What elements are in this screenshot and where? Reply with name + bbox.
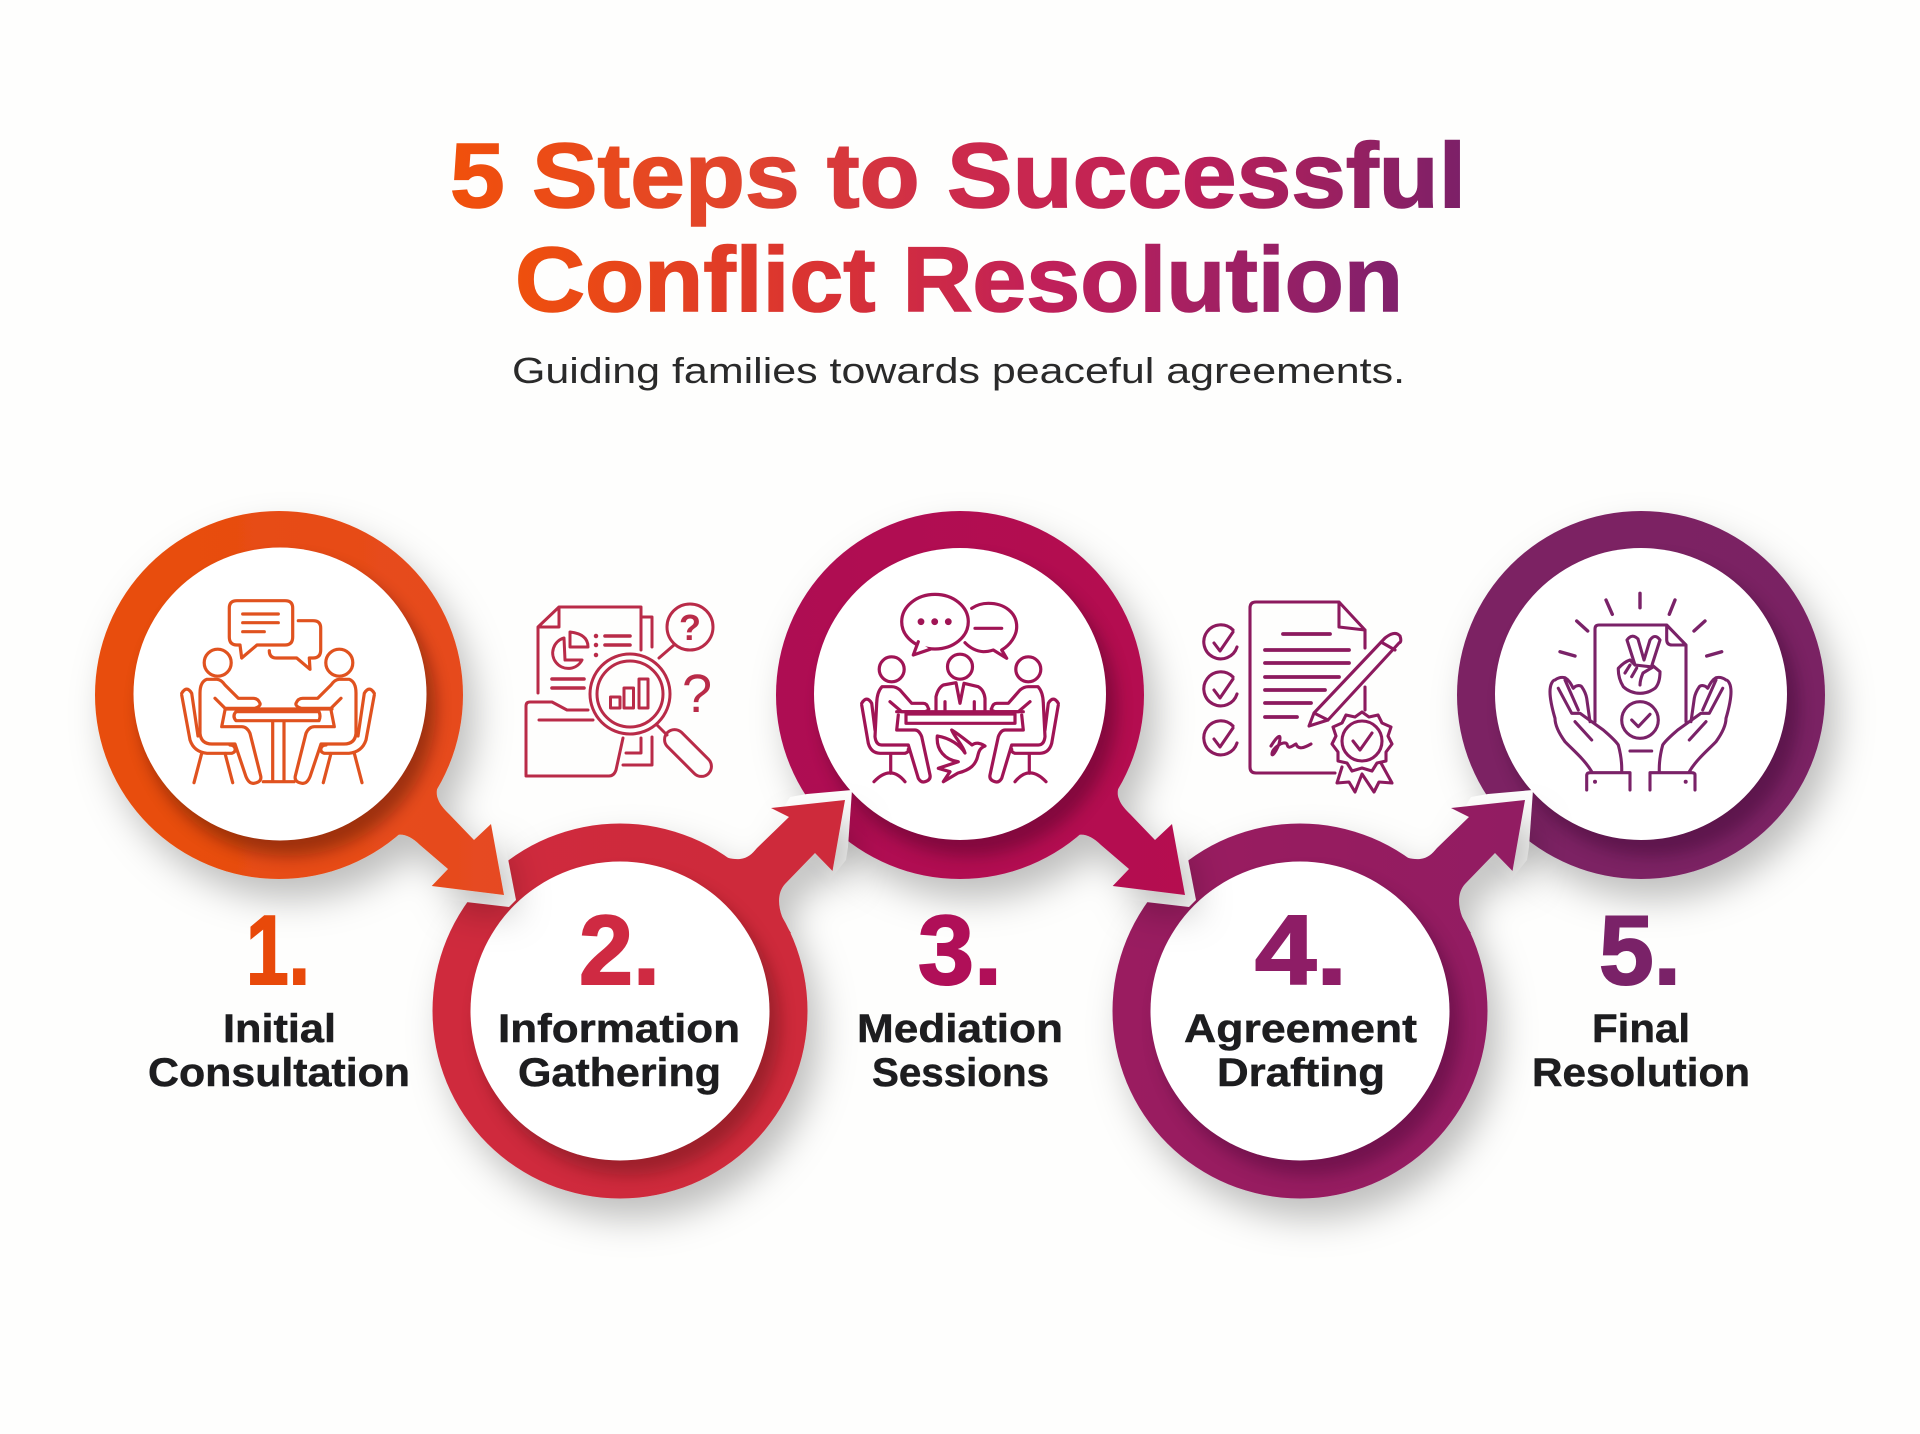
step 1 ring with arrow <box>95 511 504 895</box>
step 5 ring <box>1451 511 1825 880</box>
step 4 number and label: Agreement <box>1184 1007 1417 1051</box>
step 5 number and label: Resolution <box>1532 1051 1750 1095</box>
title: Conflict Resolution <box>515 229 1403 331</box>
step 5 number and label <box>1532 895 1750 1095</box>
icon: mediation meeting <box>862 594 1058 782</box>
infographic canvas <box>88 140 1856 1238</box>
step 2 number and label: 2. <box>579 895 660 1005</box>
step 1 number and label: 1. <box>246 895 310 1005</box>
step 3 number and label: Sessions <box>872 1051 1049 1095</box>
step 2 number and label: Information <box>498 1007 740 1051</box>
subtitle: Guiding families towards peaceful agreements. <box>512 350 1405 391</box>
step 1 number and label: Initial <box>223 1007 336 1051</box>
step 5 number and label: 5. <box>1599 895 1681 1005</box>
title: 5 Steps to Successful <box>450 125 1466 227</box>
step 2 number and label: Gathering <box>518 1051 721 1095</box>
step 2 ring with arrow <box>430 800 845 1198</box>
step 5 number and label: Final <box>1592 1007 1690 1051</box>
step 3 number and label <box>857 895 1063 1095</box>
icon: final resolution hands and document <box>1550 593 1731 790</box>
icon: document analysis with magnifier <box>526 604 716 781</box>
title <box>450 125 1466 331</box>
step 4 number and label: 4. <box>1255 895 1347 1005</box>
step 2 number and label <box>498 895 740 1095</box>
step 4 ring with arrow <box>1110 800 1525 1198</box>
step 3 ring with arrow <box>770 511 1185 895</box>
icon: question marks <box>679 607 712 724</box>
icon: agreement document <box>1204 602 1401 792</box>
icon: question marks: ? <box>682 664 712 724</box>
step 4 number and label <box>1184 895 1417 1095</box>
step 4 number and label: Drafting <box>1217 1051 1385 1095</box>
step 3 number and label: 3. <box>918 895 1002 1005</box>
icon: question marks: ? <box>679 607 701 648</box>
step 3 number and label: Mediation <box>857 1007 1063 1051</box>
step 1 number and label: Consultation <box>148 1051 410 1095</box>
step 1 number and label <box>148 895 410 1095</box>
icon: consultation at table <box>182 601 374 783</box>
